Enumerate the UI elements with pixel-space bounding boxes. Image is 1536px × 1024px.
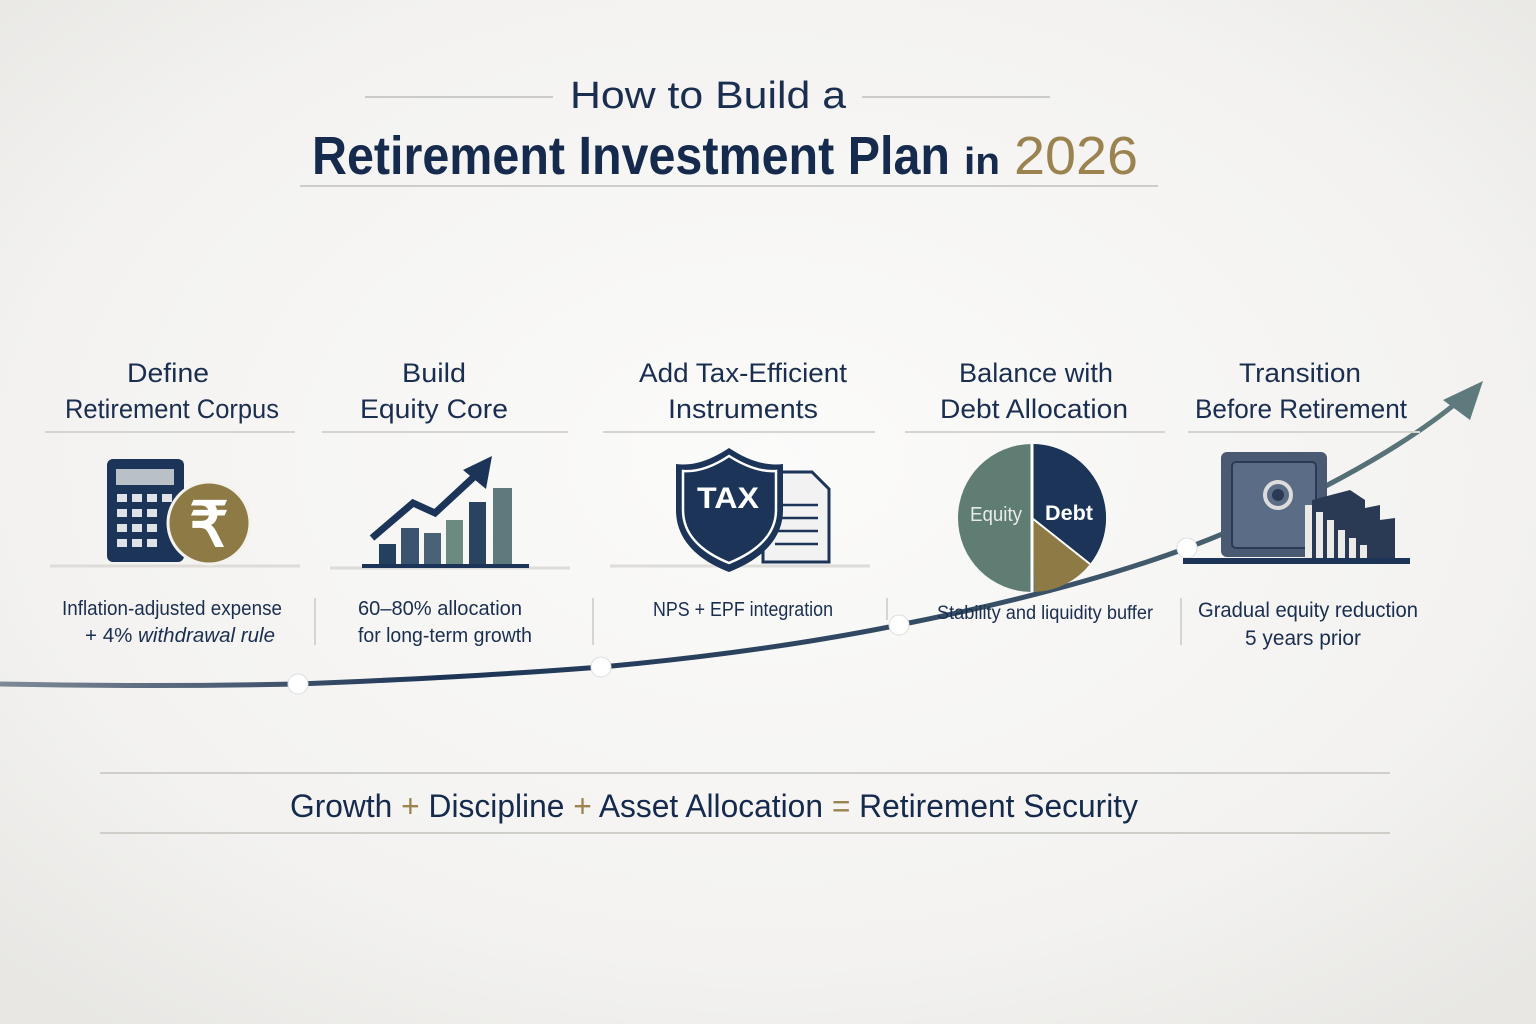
title: 2026 [1014, 126, 1138, 186]
column 1: define retirement corpus: Inflation-adjusted expense [62, 598, 282, 620]
icon: rising bar chart with arrow [330, 456, 570, 568]
column 2: build equity core: Build [402, 358, 466, 388]
title: in [964, 141, 1000, 183]
column 4: balance with debt allocation: Balance with [959, 358, 1113, 388]
column 5: transition before retirement [1183, 358, 1420, 650]
column 5: transition before retirement: Gradual equity reduction [1198, 599, 1418, 622]
growth curve with arrow [0, 381, 1483, 694]
column 1: define retirement corpus: Define [127, 358, 209, 388]
column 2: build equity core [322, 358, 570, 647]
column 5: transition before retirement: Before Retirement [1195, 394, 1407, 424]
column 1: define retirement corpus: + 4% withdrawal rule [85, 625, 275, 647]
icon: tax shield with document: TAX [697, 482, 759, 515]
icon: calculator with rupee coin: ₹ [189, 491, 229, 560]
icon: safe with declining bars [1183, 452, 1410, 564]
column 4: balance with debt allocation: Stability and liquidity buffer [937, 603, 1154, 624]
pie chart: equity / debt [958, 444, 1106, 592]
column 1: define retirement corpus [45, 358, 300, 647]
column 3: add tax-efficient instruments: Add Tax-Efficient [639, 358, 848, 388]
title: Retirement Investment Plan [312, 126, 950, 186]
header: subtitle: How to Build a [570, 75, 847, 117]
column 5: transition before retirement: 5 years prior [1245, 627, 1361, 650]
icon: calculator with rupee coin [50, 459, 300, 566]
pie chart: equity / debt: Debt [1045, 502, 1093, 525]
pie chart: equity / debt: Equity [970, 504, 1022, 526]
column 3: add tax-efficient instruments: Instruments [668, 394, 818, 424]
column 4: balance with debt allocation [905, 358, 1165, 624]
column 3: add tax-efficient instruments [603, 358, 875, 621]
footer equation: Growth + Discipline + Asset Allocation = Retirement Security [290, 788, 1138, 824]
column 2: build equity core: Equity Core [360, 394, 508, 424]
column 2: build equity core: for long-term growth [358, 625, 532, 647]
icon: tax shield with document [610, 448, 870, 572]
column 1: define retirement corpus: Retirement Corpus [65, 394, 279, 424]
column 4: balance with debt allocation: Debt Allocation [940, 394, 1128, 424]
column 2: build equity core: 60–80% allocation [358, 598, 522, 620]
column 5: transition before retirement: Transition [1239, 358, 1361, 388]
column 3: add tax-efficient instruments: NPS + EPF integration [653, 599, 833, 621]
